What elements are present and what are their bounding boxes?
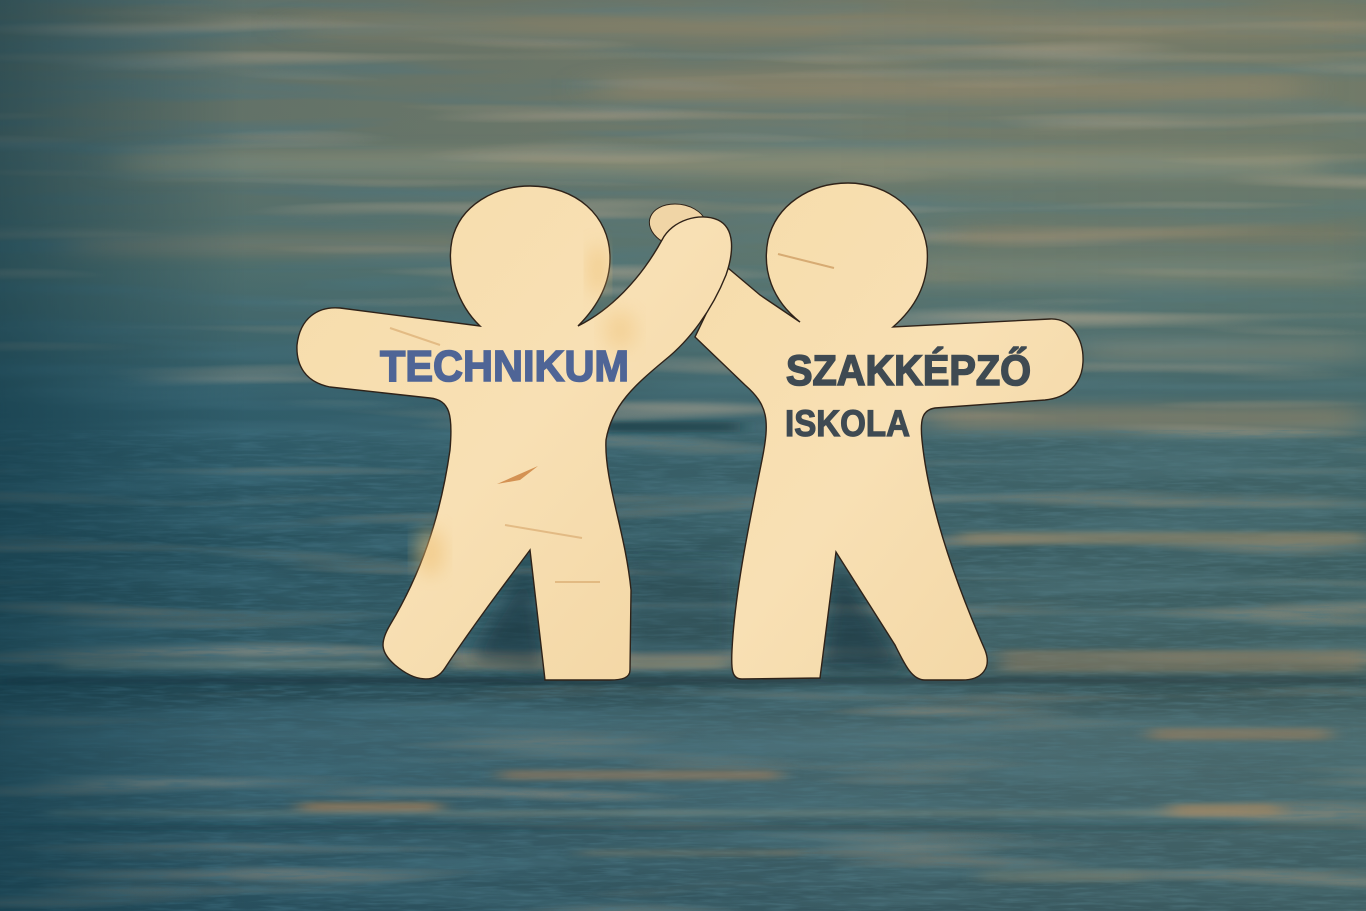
label: ISKOLA: ISKOLA [785,403,910,444]
figure: left person [297,186,732,680]
hand behind [649,204,705,250]
label: SZAKKÉPZŐ: SZAKKÉPZŐ [786,347,1031,395]
label: TECHNIKUM: TECHNIKUM [380,342,629,391]
figure: right person [649,183,1083,680]
shadow under the figures [470,560,905,670]
